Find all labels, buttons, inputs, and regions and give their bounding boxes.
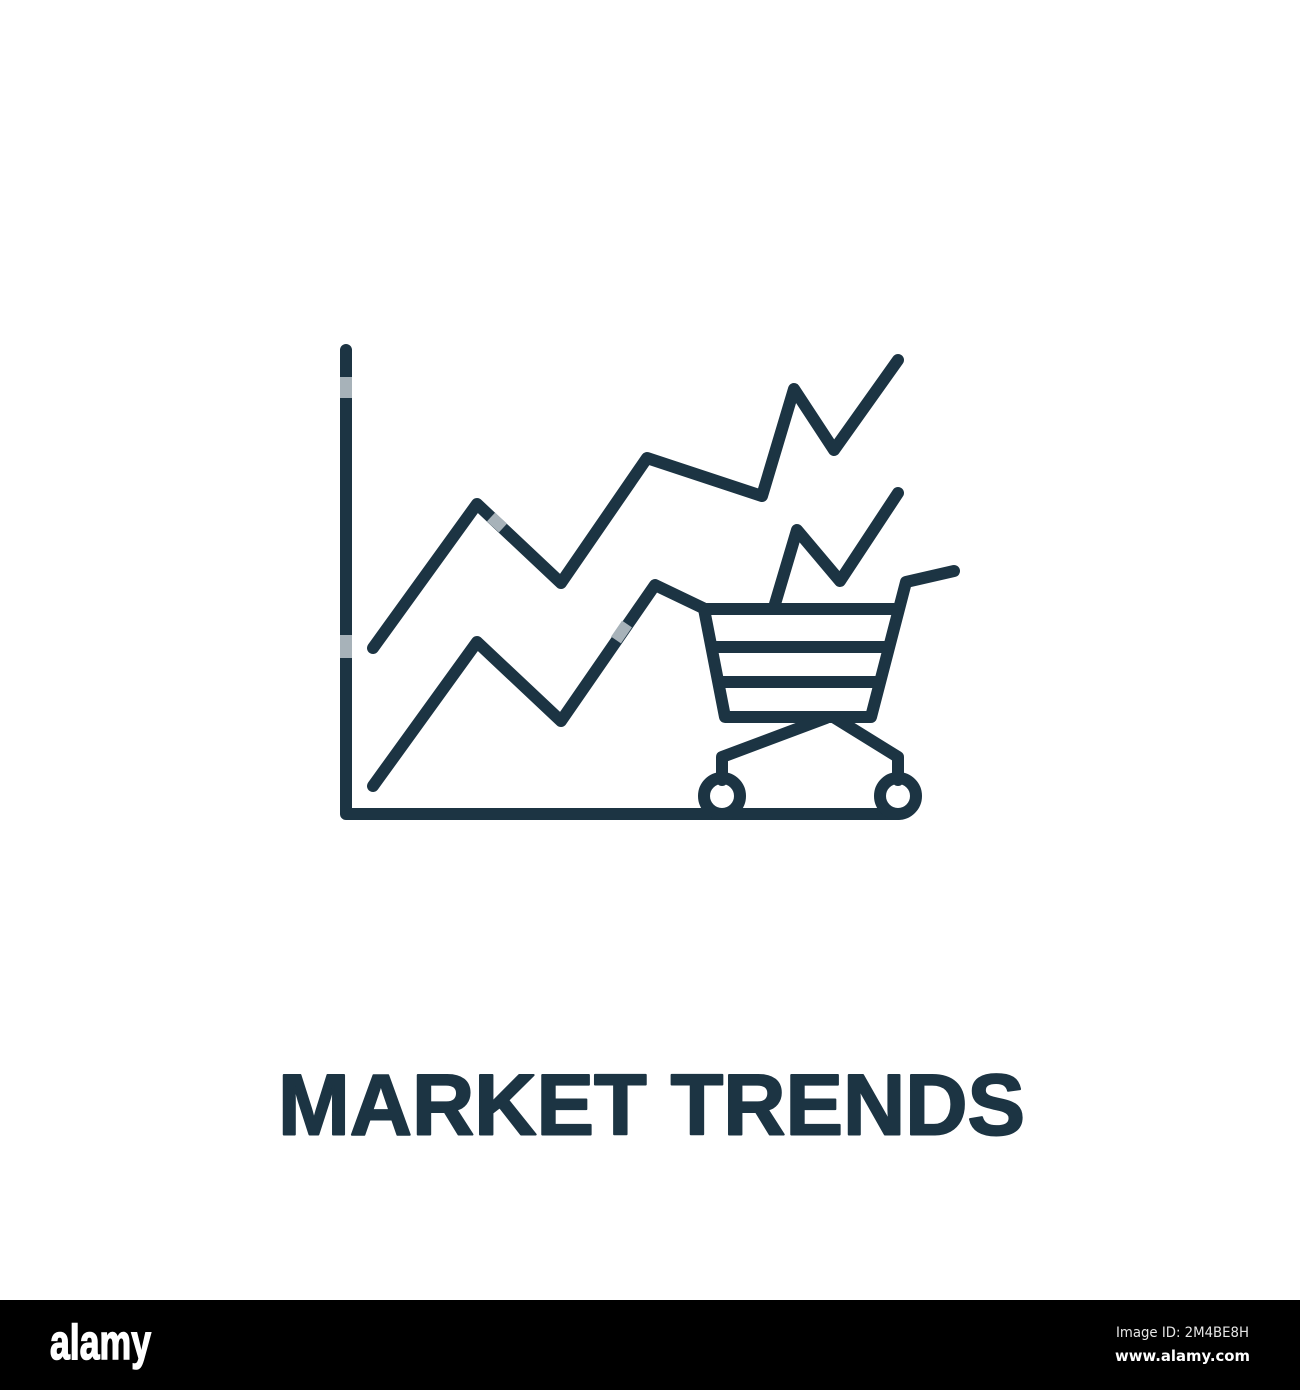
icon: market trends chart with shopping cart bbox=[346, 350, 954, 814]
upper trend line bbox=[373, 360, 898, 648]
right cart wheel bbox=[880, 778, 916, 814]
footer logo: alamy bbox=[50, 1316, 151, 1370]
title: MARKET TRENDS bbox=[278, 1058, 1025, 1154]
footer bar bbox=[0, 1300, 1300, 1390]
cart undercarriage bbox=[722, 718, 898, 780]
chart axes bbox=[346, 350, 898, 814]
trend line rising out of cart bbox=[775, 493, 898, 604]
image id: Image ID: 2M4BE8H bbox=[1116, 1325, 1249, 1341]
lower trend line bbox=[373, 585, 703, 786]
shopping cart basket bbox=[704, 571, 954, 717]
left cart wheel bbox=[704, 778, 740, 814]
website address: www.alamy.com bbox=[1115, 1347, 1250, 1365]
